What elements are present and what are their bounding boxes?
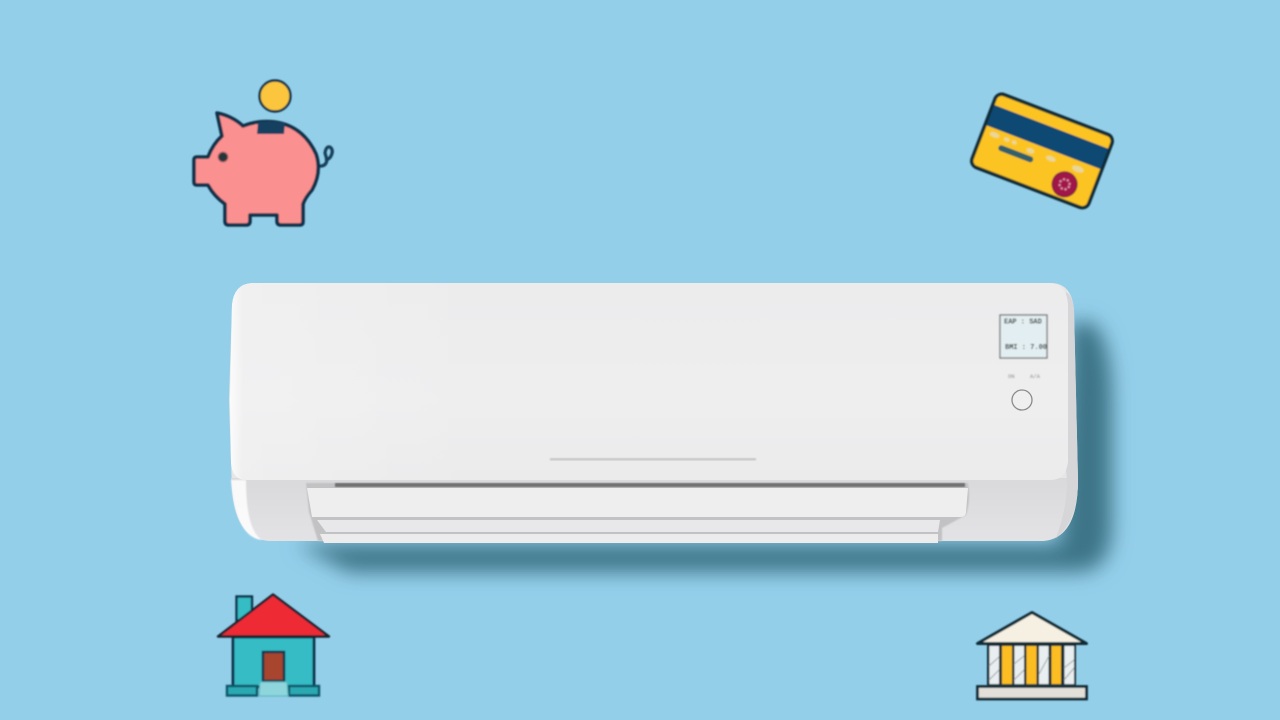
icon: bank building [978, 612, 1086, 699]
coin [260, 80, 290, 112]
plinth [978, 686, 1086, 699]
air conditioner unit [229, 283, 1078, 543]
base right [289, 686, 319, 696]
coin slot [257, 121, 285, 134]
pediment [978, 612, 1086, 644]
unit body [229, 283, 1078, 541]
roof [218, 594, 329, 636]
walls [233, 637, 314, 687]
panel groove [550, 458, 756, 460]
card chip [1048, 168, 1081, 200]
middle louver [317, 520, 940, 532]
door [263, 652, 284, 681]
icon: house [218, 594, 329, 696]
pig tail [318, 147, 332, 166]
yellow columns [1002, 646, 1061, 684]
icon: credit card [970, 92, 1114, 210]
display text top: EAP : SAD [1004, 318, 1042, 326]
air conditioner shadow [296, 322, 1112, 572]
left highlight of housing [231, 480, 262, 540]
white columns [990, 646, 1074, 684]
base left [227, 686, 257, 696]
display text bottom: BMI : 7.00 [1005, 344, 1047, 352]
steps [259, 682, 288, 696]
right edge of body [1056, 292, 1078, 538]
column backing [987, 645, 1076, 685]
vent opening [306, 483, 969, 541]
icon: piggy bank with coin [194, 80, 332, 225]
power button [1012, 390, 1032, 410]
indicator labels: A/A [1030, 373, 1041, 380]
column marble streaks [989, 656, 1074, 680]
pig body [194, 113, 318, 225]
upper louver [307, 488, 968, 517]
pig eye [218, 152, 228, 162]
card number dots [988, 131, 1085, 174]
display [1000, 315, 1047, 358]
front panel [230, 283, 1068, 480]
front panel highlight [230, 283, 1068, 480]
card body [970, 92, 1114, 210]
lower housing [231, 478, 1078, 541]
vent dark slit [335, 483, 965, 487]
indicator labels: ON [1008, 373, 1015, 380]
chimney [236, 596, 252, 620]
lower louver [320, 534, 938, 543]
indicator labels [1008, 373, 1041, 380]
signature bar [997, 144, 1034, 163]
magnetic stripe [986, 105, 1108, 169]
